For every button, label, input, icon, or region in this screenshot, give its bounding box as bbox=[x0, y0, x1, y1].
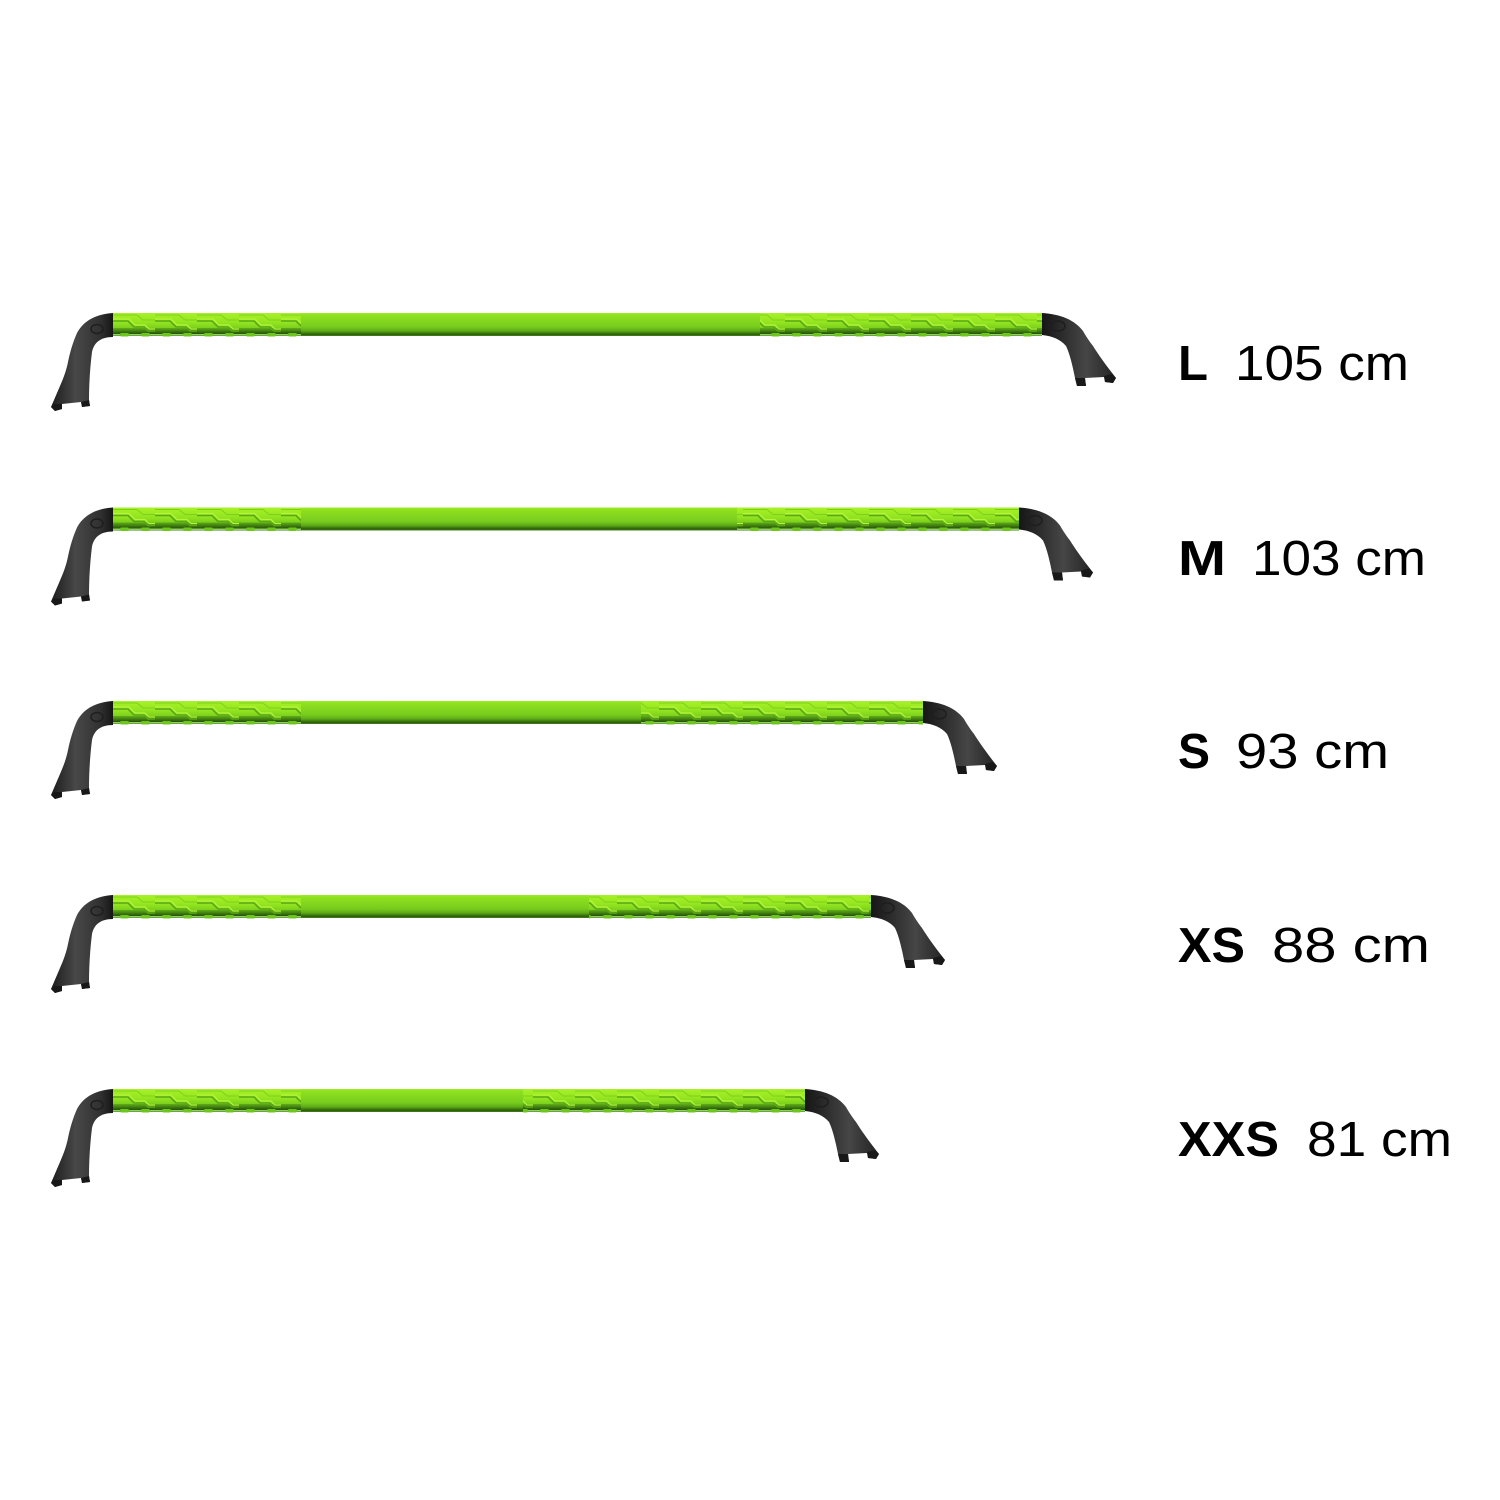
left end cap bbox=[51, 508, 113, 606]
label XS 88 cm: XS bbox=[1178, 919, 1245, 973]
right tread bbox=[523, 1089, 805, 1114]
right end cap bbox=[805, 1089, 879, 1162]
left tread bbox=[113, 1089, 301, 1114]
label M 103 cm: 103 cm bbox=[1252, 532, 1426, 586]
right tread bbox=[589, 895, 871, 920]
bar M 103 cm bbox=[51, 508, 1093, 606]
right end cap bbox=[1019, 508, 1093, 580]
left tread bbox=[113, 508, 301, 532]
label S 93 cm bbox=[1178, 725, 1389, 779]
label M 103 cm bbox=[1178, 532, 1426, 586]
label M 103 cm: M bbox=[1178, 532, 1226, 586]
label L 105 cm: 105 cm bbox=[1235, 337, 1409, 391]
label L 105 cm: L bbox=[1178, 337, 1208, 391]
label L 105 cm bbox=[1178, 337, 1409, 391]
label S 93 cm: S bbox=[1178, 725, 1210, 779]
left end cap bbox=[51, 313, 113, 411]
bar XS 88 cm bbox=[51, 895, 945, 993]
label S 93 cm: 93 cm bbox=[1236, 725, 1389, 779]
left end cap bbox=[51, 895, 113, 993]
label XS 88 cm bbox=[1178, 919, 1430, 973]
right tread bbox=[760, 313, 1042, 338]
green tube bbox=[113, 508, 1019, 530]
label XXS 81 cm bbox=[1178, 1113, 1452, 1167]
green tube bbox=[113, 1089, 805, 1112]
right end cap bbox=[1042, 313, 1116, 386]
label XS 88 cm: 88 cm bbox=[1272, 919, 1430, 973]
green tube bbox=[113, 313, 1042, 336]
right end cap bbox=[871, 895, 945, 968]
left end cap bbox=[51, 701, 113, 799]
label XXS 81 cm: XXS bbox=[1178, 1113, 1279, 1167]
label XXS 81 cm: 81 cm bbox=[1307, 1113, 1452, 1167]
green tube bbox=[113, 895, 871, 918]
left tread bbox=[113, 313, 301, 338]
left tread bbox=[113, 701, 301, 726]
green tube bbox=[113, 701, 923, 724]
right tread bbox=[641, 701, 923, 726]
left end cap bbox=[51, 1089, 113, 1187]
right end cap bbox=[923, 701, 997, 774]
right tread bbox=[737, 508, 1019, 532]
bar L 105 cm bbox=[51, 313, 1116, 411]
bar S 93 cm bbox=[51, 701, 997, 799]
left tread bbox=[113, 895, 301, 920]
bar XXS 81 cm bbox=[51, 1089, 879, 1187]
